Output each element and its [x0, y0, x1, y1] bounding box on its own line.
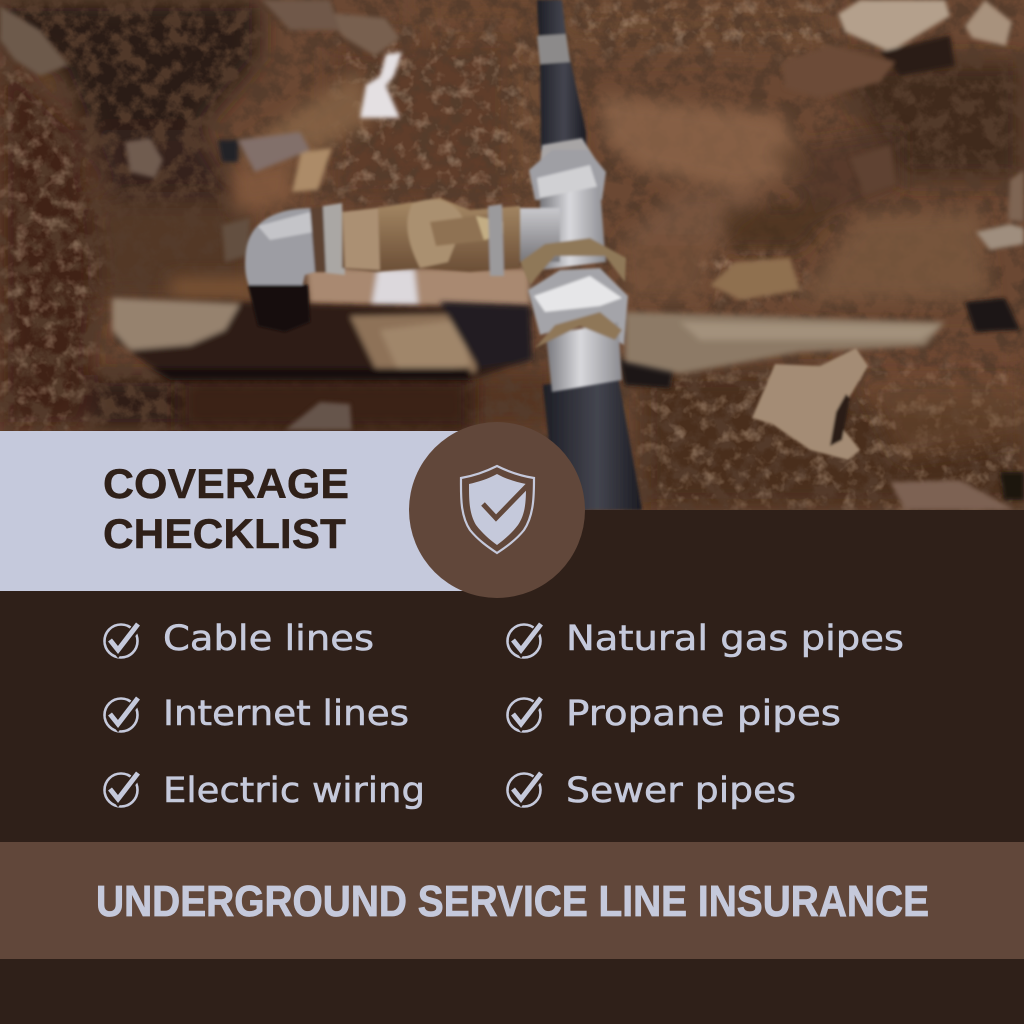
footer title: UNDERGROUND SERVICE LINE INSURANCE [96, 877, 929, 926]
silver T fitting and lower pipe [517, 138, 628, 392]
heading: coverage checklist: COVERAGE [103, 460, 349, 507]
rocks and water [0, 0, 1024, 510]
smooth mud and water [170, 70, 1024, 460]
old horizontal pipe [112, 298, 945, 380]
item: sewer pipes: Sewer pipes [566, 771, 796, 811]
rock in foreground [752, 348, 868, 460]
icon: shield with check [461, 466, 534, 553]
water under valve [306, 268, 530, 306]
heading panel: CHECKLIST [103, 510, 346, 557]
item: electric wiring: Electric wiring [163, 771, 425, 811]
item: cable lines: Cable lines [163, 619, 374, 659]
photo: excavated trench with pipes and valve [0, 0, 1024, 510]
checklist left column [104, 619, 425, 811]
item: natural gas pipes: Natural gas pipes [566, 619, 904, 659]
brass valve and silver elbow [245, 198, 520, 332]
black pipe, upper and lower [537, 0, 642, 510]
shield badge [409, 422, 585, 598]
item: internet lines: Internet lines [163, 694, 409, 734]
checklist right column [508, 619, 904, 811]
soil texture [0, 0, 1024, 510]
footer band [0, 842, 1024, 959]
item: propane pipes: Propane pipes [566, 694, 841, 734]
heading panel [0, 431, 470, 591]
